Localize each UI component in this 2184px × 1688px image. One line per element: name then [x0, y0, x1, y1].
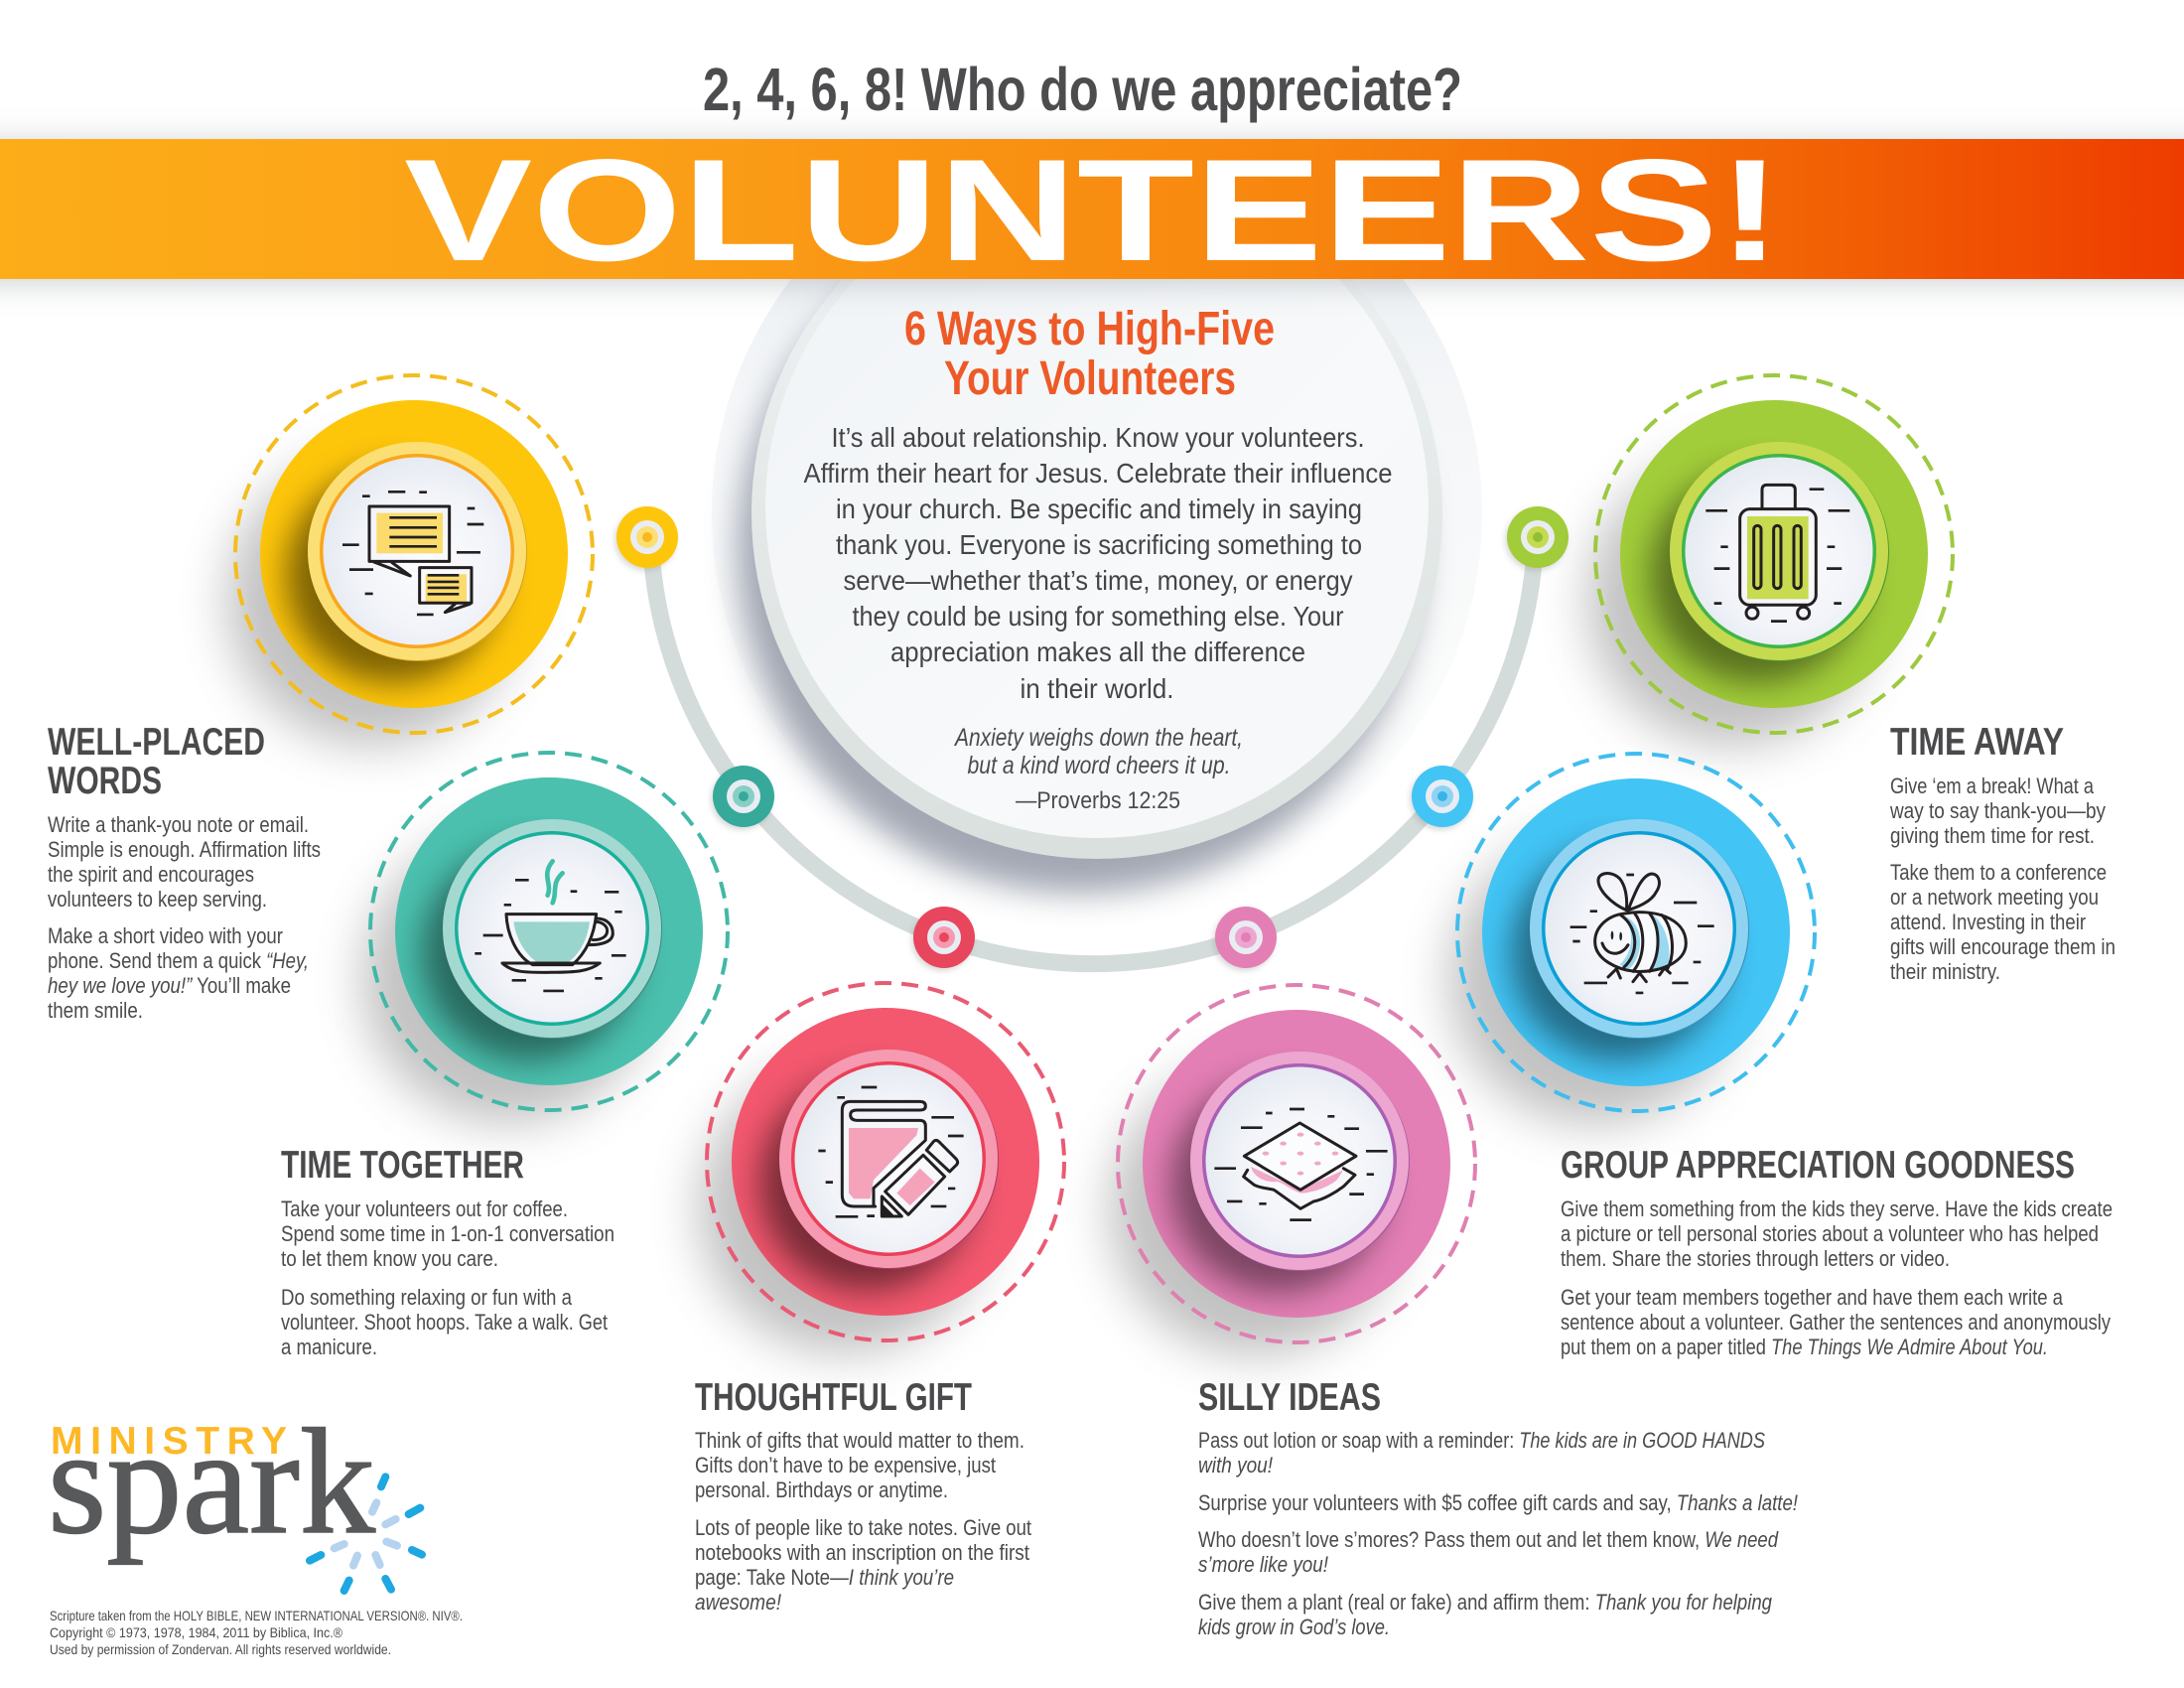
text block [281, 1196, 614, 1359]
text block [1198, 1428, 1799, 1639]
central panel: backdrop disc [713, 279, 1482, 530]
text block: personal. Birthdays or anytime. [695, 1477, 948, 1502]
text block: copyright [50, 1608, 463, 1657]
text block: scripture: but a kind word cheers it up. [967, 752, 1231, 779]
medallion: thoughtful gift [699, 983, 1064, 1353]
section: time away [1889, 721, 2116, 984]
text block: Take them to a conference [1890, 860, 2107, 885]
text block: copyright: Copyright © 1973, 1978, 1984, 2011 by Biblica, Inc.® [50, 1624, 343, 1640]
icon: s'more [1214, 1109, 1388, 1220]
heading: THOUGHTFUL GIFT [695, 1376, 972, 1419]
text block: Write a thank-you note or email. [48, 812, 309, 837]
medallion: well-placed words [227, 375, 593, 746]
node: green [1505, 506, 1569, 571]
connector arc [650, 537, 1536, 964]
text block: awesome! [695, 1590, 782, 1615]
text block: Spend some time in 1-on-1 conversation [281, 1221, 614, 1246]
text block: Simple is enough. Affirmation lifts [48, 837, 321, 862]
icon: coffee cup [475, 861, 626, 991]
text block: attend. Investing in their [1890, 910, 2086, 934]
text block: scripture: Anxiety weighs down the heart, [953, 724, 1243, 752]
text block: Who doesn’t love s’mores? Pass them out and let them know, We need [1198, 1527, 1779, 1552]
text block: way to say thank-you—by [1889, 798, 2107, 823]
text block [1889, 774, 2116, 984]
heading: WELL-PLACED [48, 721, 265, 764]
section: silly ideas [1198, 1376, 1799, 1639]
text block: intro: serve—whether that’s time, money, or energy [844, 565, 1352, 596]
text block: to let them know you care. [281, 1246, 498, 1271]
text block: or a network meeting you [1890, 885, 2099, 910]
text block: Think of gifts that would matter to them. [695, 1428, 1024, 1453]
section: group appreciation goodness [1561, 1144, 2113, 1359]
text block [695, 1428, 1032, 1615]
node: teal [711, 766, 774, 830]
text block: Make a short video with your [48, 923, 283, 948]
text block: Take your volunteers out for coffee. [281, 1196, 568, 1221]
heading: 6 ways: 6 Ways to High-Five [904, 303, 1275, 355]
text block: intro: Affirm their heart for Jesus. Celebrate their influence [804, 458, 1392, 489]
heading: TIME TOGETHER [281, 1144, 524, 1187]
text block: scripture [953, 724, 1243, 814]
text block: notebooks with an inscription on the first [695, 1540, 1030, 1565]
text block: put them on a paper titled The Things We Admire About You. [1561, 1335, 2048, 1359]
title: kicker: 2, 4, 6, 8! Who do we appreciate? [703, 56, 1462, 123]
logo: ministry spark: spark [48, 1398, 375, 1565]
text block: them smile. [48, 998, 143, 1023]
text block: intro: in their world. [1021, 673, 1173, 704]
node: red [911, 907, 975, 971]
node: yellow [614, 506, 678, 571]
text block: giving them time for rest. [1890, 823, 2095, 848]
central panel: text [804, 303, 1392, 814]
heading: TIME AWAY [1890, 721, 2064, 764]
medallion: time away [1587, 375, 1953, 746]
text block: a manicure. [281, 1335, 377, 1359]
text block: intro: thank you. Everyone is sacrificing something to [836, 529, 1362, 560]
icon: bee [1570, 874, 1714, 993]
heading: 6 ways [904, 303, 1275, 405]
connector nodes [614, 506, 1569, 971]
section: well-placed words [48, 721, 321, 1023]
heading: SILLY IDEAS [1198, 1376, 1381, 1419]
heading: 6 ways: Your Volunteers [944, 352, 1236, 405]
text block: copyright: Used by permission of Zondervan. All rights reserved worldwide. [50, 1641, 391, 1657]
text block: kids grow in God’s love. [1198, 1615, 1390, 1639]
text block: volunteer. Shoot hoops. Take a walk. Get [281, 1310, 609, 1335]
section: thoughtful gift [695, 1376, 1032, 1615]
icon: speech bubbles [342, 492, 483, 615]
text block: page: Take Note—I think you’re [695, 1565, 954, 1590]
text block: hey we love you!” You’ll make [48, 973, 291, 998]
text block: Give ‘em a break! What a [1890, 774, 2094, 798]
text block: gifts will encourage them in [1890, 934, 2116, 959]
logo: ministry spark: MINISTRY [51, 1420, 287, 1463]
icon: suitcase [1706, 485, 1849, 622]
text block: Do something relaxing or fun with a [281, 1285, 572, 1310]
text block: with you! [1198, 1453, 1274, 1477]
text block: Pass out lotion or soap with a reminder: The kids are in GOOD HANDS [1198, 1428, 1765, 1453]
medallion: time together [362, 753, 728, 1123]
title: volunteers: VOLUNTEERS! [404, 129, 1782, 291]
text block: intro: in your church. Be specific and timely in saying [836, 493, 1362, 524]
text block: copyright: Scripture taken from the HOLY BIBLE, NEW INTERNATIONAL VERSION®. NIV®. [50, 1608, 463, 1623]
text block: Give them a plant (real or fake) and affirm them: Thank you for helping [1198, 1590, 1772, 1615]
text block: volunteers to keep serving. [48, 887, 267, 912]
medallion: silly ideas [1110, 985, 1475, 1355]
text block: Lots of people like to take notes. Give out [695, 1515, 1032, 1540]
text block: them. Share the stories through letters or video. [1561, 1246, 1950, 1271]
text block: intro [804, 422, 1392, 704]
text block [48, 812, 321, 1023]
section: time together [281, 1144, 614, 1359]
text block: intro: It’s all about relationship. Know your volunteers. [832, 422, 1364, 453]
icon: spark rays [310, 1477, 422, 1591]
node: blue [1410, 766, 1473, 830]
text block: Surprise your volunteers with $5 coffee gift cards and say, Thanks a latte! [1198, 1490, 1799, 1515]
medallion: group appreciation goodness [1449, 754, 1815, 1124]
text block: phone. Send them a quick “Hey, [48, 948, 309, 973]
text block: intro: appreciation makes all the difference [890, 636, 1305, 667]
heading: WORDS [48, 760, 162, 802]
text block [1561, 1196, 2113, 1359]
text block: scripture: —Proverbs 12:25 [1016, 787, 1180, 814]
text block: Get your team members together and have them each write a [1561, 1285, 2063, 1310]
text block: the spirit and encourages [48, 862, 254, 887]
icon: notebook and pencil [818, 1087, 964, 1216]
banner [0, 139, 2184, 283]
text block: s’more like you! [1198, 1552, 1329, 1577]
text block: Gifts don’t have to be expensive, just [695, 1453, 997, 1477]
node: pink [1213, 907, 1277, 971]
heading [48, 721, 265, 802]
text block: their ministry. [1890, 959, 2000, 984]
text block: intro: they could be using for something else. Your [852, 601, 1344, 632]
central panel: disc with shadow [718, 284, 1442, 914]
